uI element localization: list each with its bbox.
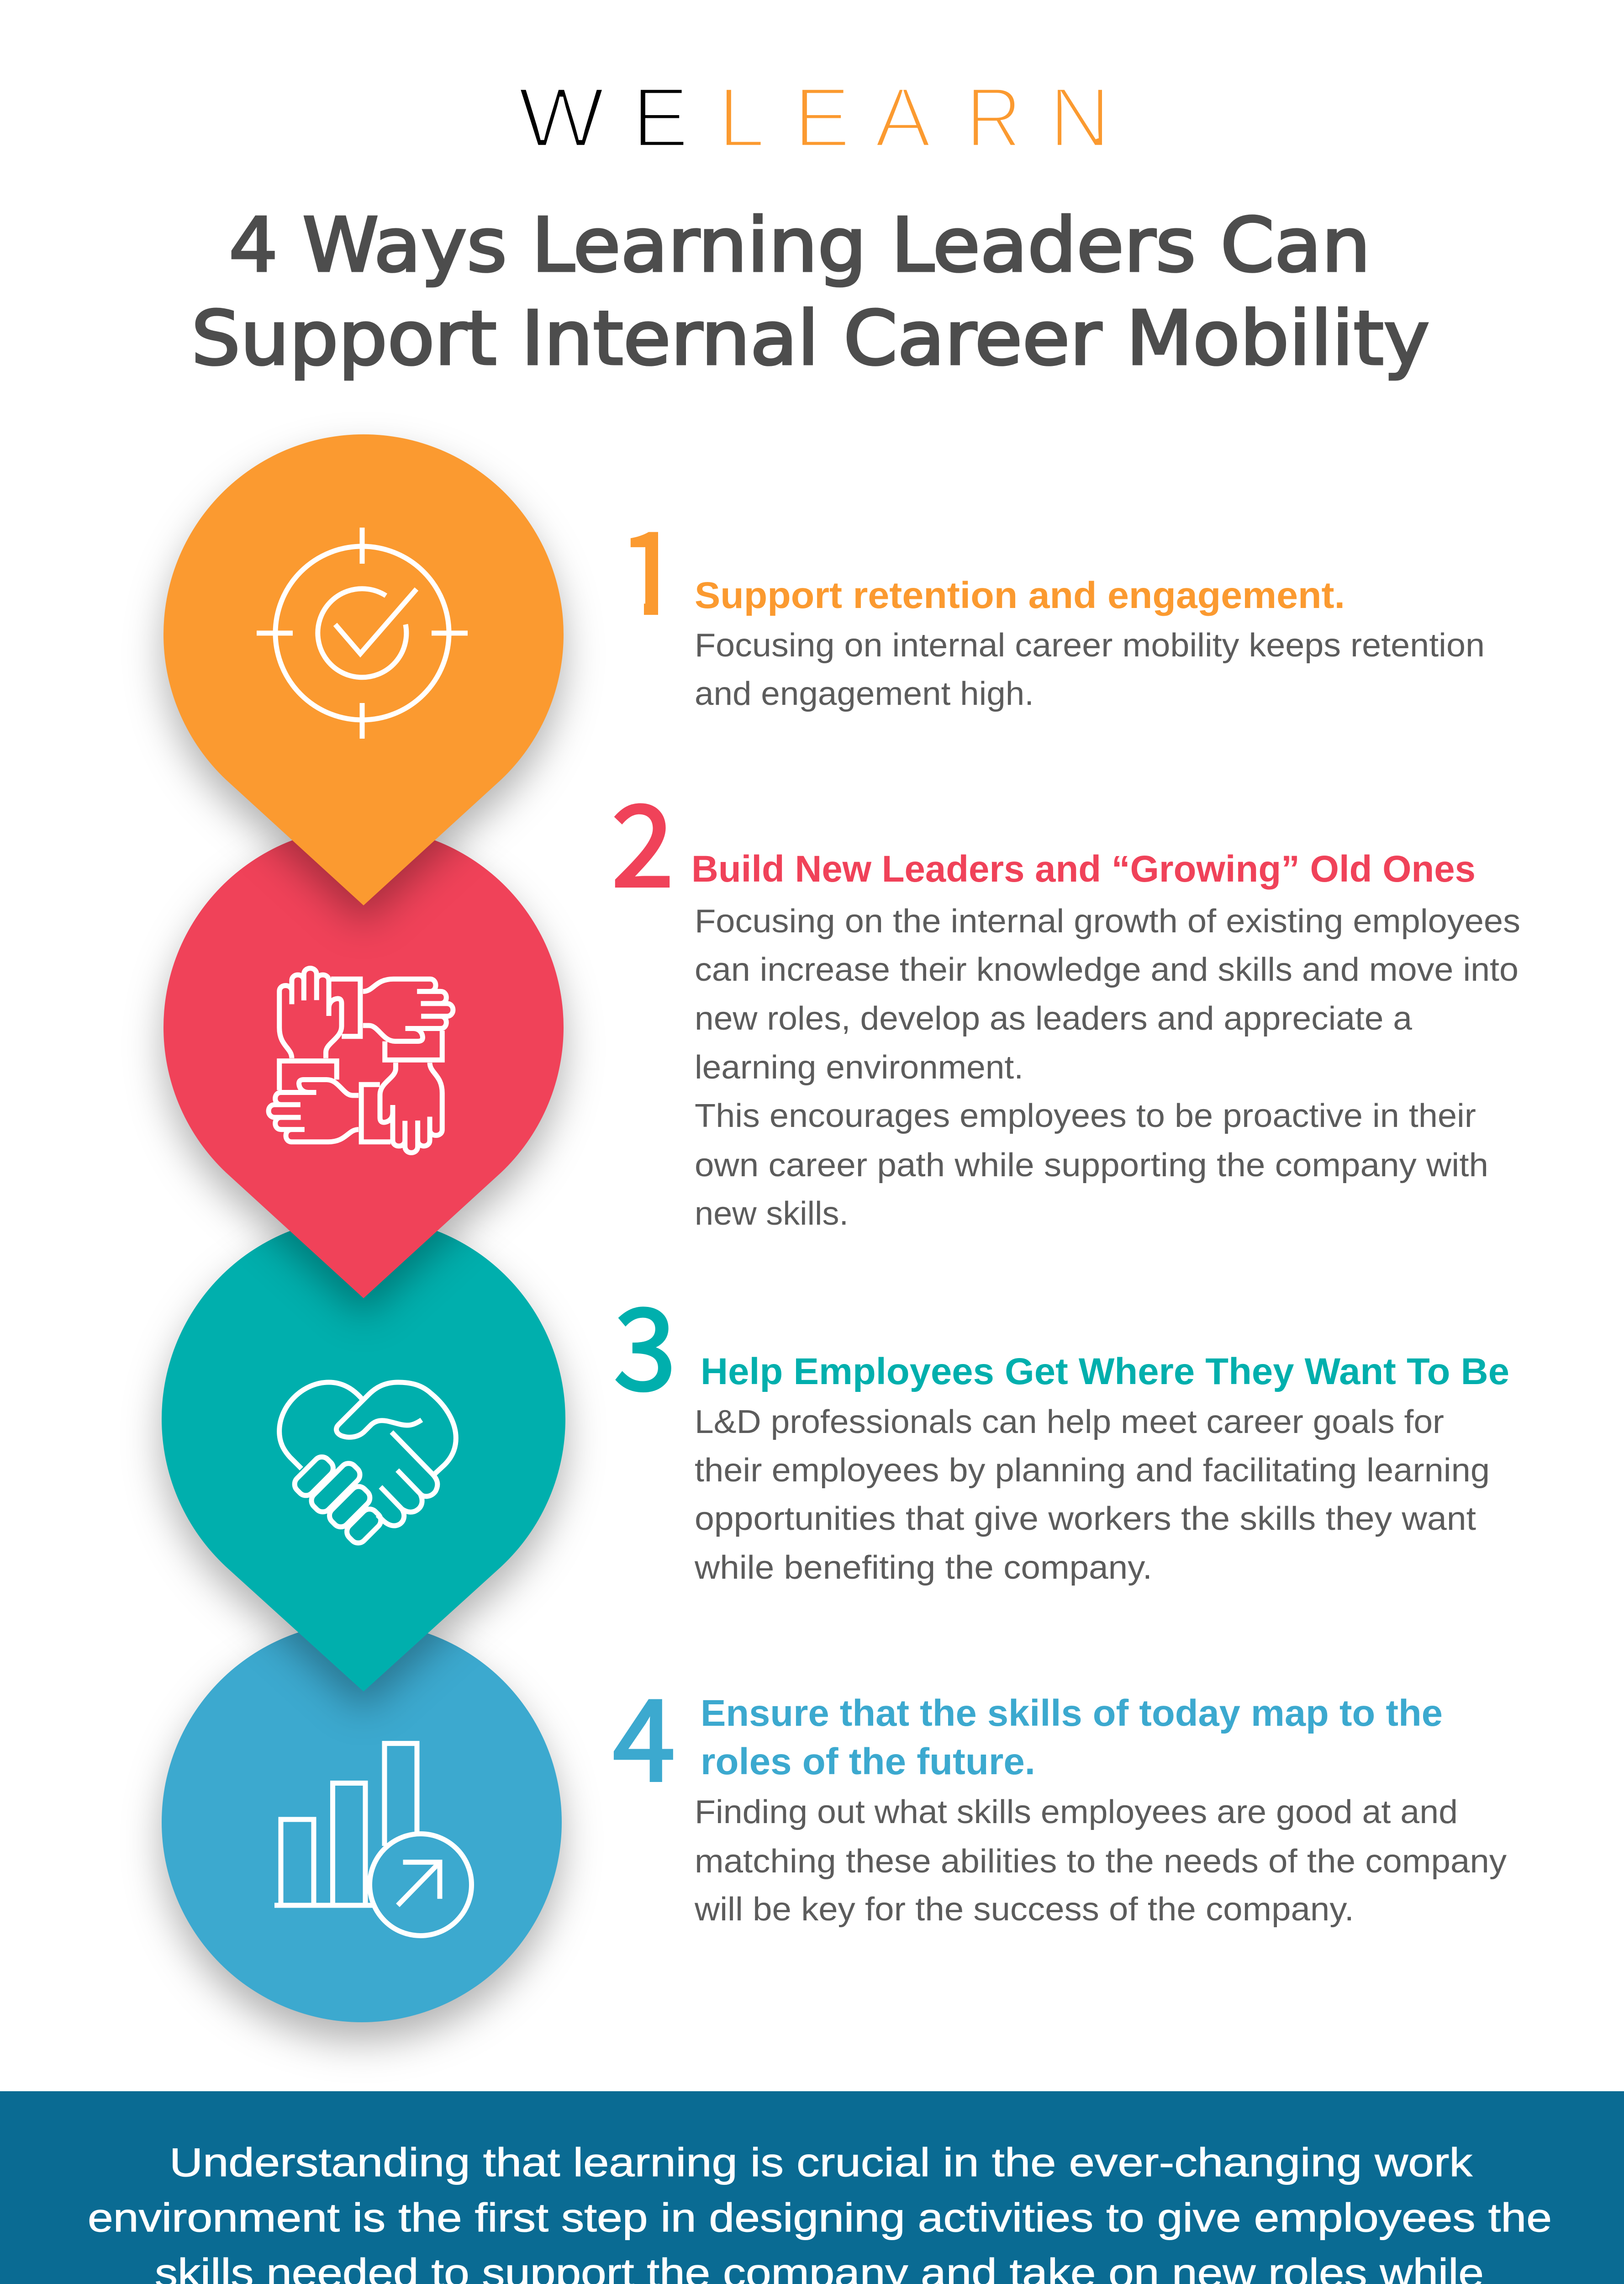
- number 4: 4: [613, 1650, 675, 1813]
- icon: target with check: [257, 528, 468, 739]
- number 1: 1: [618, 483, 681, 646]
- body 3: [694, 1404, 1490, 1586]
- section 3 text: [614, 1259, 1509, 1586]
- pin 4: blue circle: [162, 1622, 562, 2022]
- footer text: environment is the first step in designing activities to give employees the: [88, 2195, 1552, 2240]
- footer panel: [0, 2091, 1624, 2284]
- title: [191, 202, 1429, 382]
- section 4 text: [613, 1650, 1507, 1928]
- heading 4: Ensure that the skills of today map to the: [701, 1692, 1443, 1734]
- body 2: can increase their knowledge and skills and move into: [695, 952, 1519, 988]
- body 2: own career path while supporting the company with: [695, 1147, 1488, 1184]
- title: 4 Ways Learning Leaders Can: [229, 202, 1371, 289]
- title: Support Internal Career Mobility: [191, 296, 1429, 382]
- logo: WeLearn: E: [632, 70, 689, 165]
- heading 2: Build New Leaders and “Growing” Old Ones: [691, 848, 1476, 890]
- body 1: Focusing on internal career mobility keeps retention: [695, 627, 1485, 664]
- number 2: 2: [612, 756, 674, 919]
- icon: handshake heart: [279, 1382, 456, 1546]
- pin 1: orange: [163, 434, 564, 905]
- section 2 text: [612, 756, 1520, 1232]
- section 1 text: [630, 532, 1482, 712]
- body 4: matching these abilities to the needs of the company: [695, 1843, 1507, 1880]
- footer text: Understanding that learning is crucial in the ever-changing work: [169, 2140, 1473, 2185]
- icon: bar chart with arrow: [274, 1744, 471, 1936]
- body 3: their employees by planning and facilitating learning: [695, 1452, 1490, 1489]
- body 1: [695, 627, 1485, 712]
- body 3: opportunities that give workers the skills they want: [695, 1501, 1476, 1537]
- logo: WeLearn: N: [1049, 70, 1111, 165]
- logo: WeLearn: R: [966, 70, 1022, 165]
- pin 2: red: [163, 827, 564, 1298]
- logo: WeLearn: [518, 70, 1111, 165]
- icon: four hands: [269, 968, 453, 1153]
- logo: WeLearn: E: [794, 70, 850, 165]
- footer text: [88, 2140, 1552, 2284]
- heading 1: Support retention and engagement.: [695, 575, 1345, 616]
- body 2: new skills.: [695, 1195, 849, 1232]
- body 2: Focusing on the internal growth of existing employees: [695, 903, 1520, 940]
- body 3: L&D professionals can help meet career goals for: [695, 1404, 1444, 1440]
- body 2: new roles, develop as leaders and appreciate a: [695, 1000, 1413, 1037]
- body 2: [695, 903, 1520, 1232]
- body 4: will be key for the success of the company.: [694, 1891, 1354, 1928]
- heading 4: roles of the future.: [701, 1741, 1035, 1782]
- heading 3: Help Employees Get Where They Want To Be: [701, 1351, 1509, 1392]
- pin 3: teal: [162, 1217, 565, 1692]
- logo: WeLearn: W: [518, 70, 605, 165]
- body 2: learning environment.: [695, 1049, 1023, 1086]
- logo: WeLearn: L: [718, 70, 765, 165]
- body 2: This encourages employees to be proactive in their: [695, 1098, 1476, 1134]
- body 3: while benefiting the company.: [694, 1549, 1152, 1586]
- body 4: [694, 1794, 1507, 1928]
- logo: WeLearn: A: [875, 70, 931, 165]
- heading 4: [701, 1692, 1443, 1782]
- body 1: and engagement high.: [695, 676, 1034, 712]
- number 3: 3: [614, 1259, 676, 1422]
- body 4: Finding out what skills employees are good at and: [695, 1794, 1458, 1830]
